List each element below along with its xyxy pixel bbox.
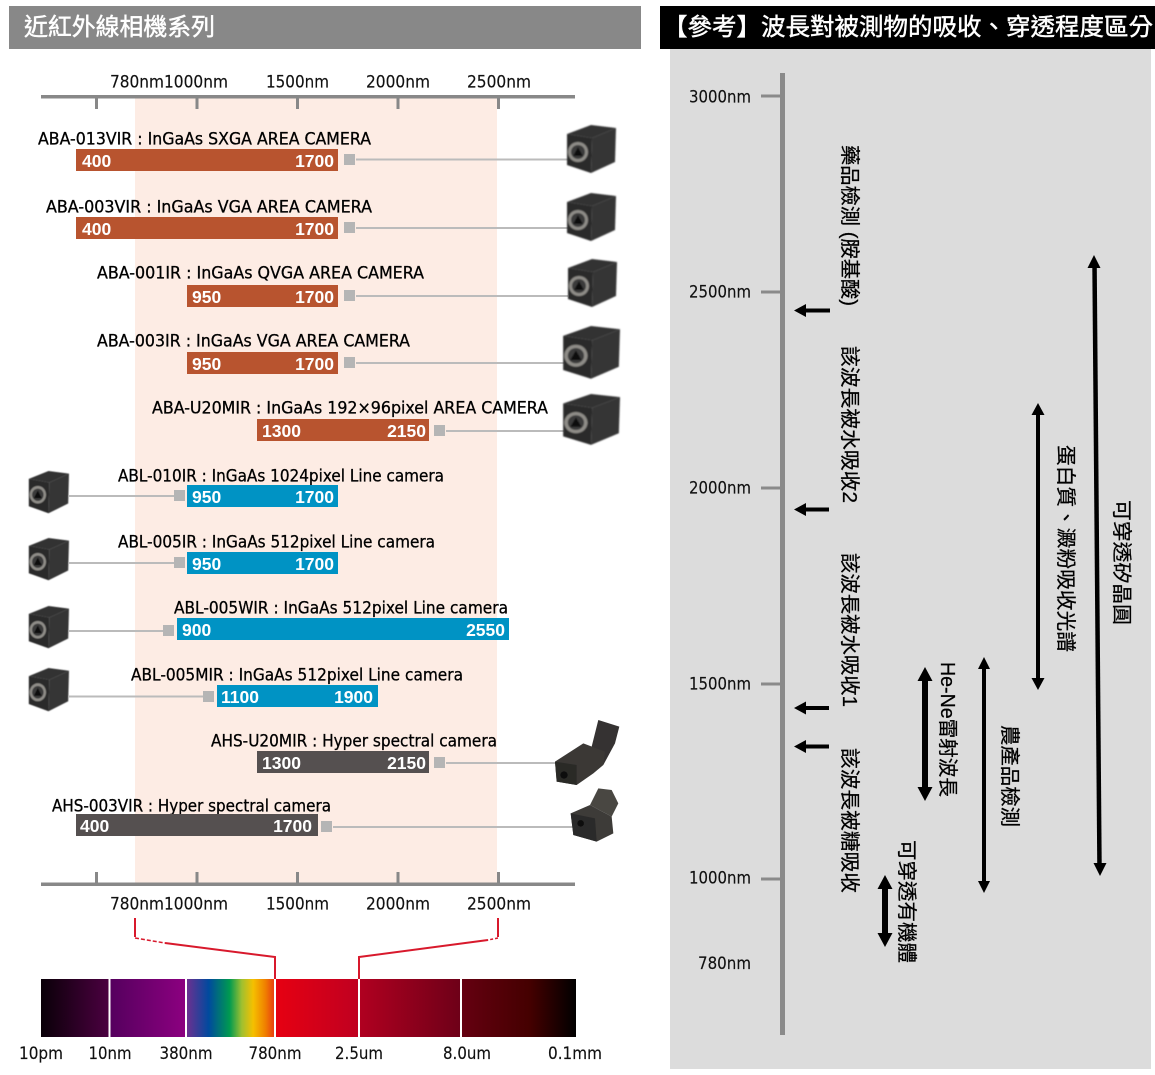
camera row: ABL-005IR: 950 (192, 554, 221, 574)
label: protein and starch: 蛋白質、澱粉吸收光譜 (1054, 445, 1077, 652)
header: reference wavelength chart (660, 6, 1155, 49)
camera row: ABL-005MIR (29, 666, 463, 711)
camera row: ABL-005WIR: 2550 (466, 620, 505, 640)
camera row: AHS-003VIR: 1700 (273, 816, 312, 836)
range arrow: protein and starch (1032, 403, 1044, 690)
label: agricultural inspection: 農產品檢測 (998, 725, 1021, 827)
red zoom connector lines (135, 918, 498, 979)
range arrow: agricultural inspection (978, 657, 990, 893)
header: reference wavelength chart: 【參考】波長對被測物的吸收、穿透程度區分 (663, 14, 1153, 41)
camera row: ABL-005IR: ABL-005IR : InGaAs 512pixel Line camera (118, 532, 435, 552)
rotated absorption labels: 該波長被糖吸收 (838, 748, 861, 893)
vertical wavelength axis: 1500nm (689, 674, 751, 694)
camera row: AHS-U20MIR: 2150 (387, 753, 426, 773)
label: organic matter: 可穿透有機體 (895, 840, 918, 963)
panel: wavelength absorption and penetration (670, 49, 1151, 1069)
camera row: AHS-003VIR: 400 (80, 816, 109, 836)
vertical wavelength axis: 2000nm (689, 478, 751, 498)
camera row: AHS-U20MIR (211, 720, 619, 785)
camera row: ABA-003VIR: ABA-003VIR : InGaAs VGA AREA CAMERA (46, 198, 373, 216)
label: silicon wafer: 可穿透矽晶圓 (1110, 500, 1133, 625)
top wavelength axis (41, 72, 575, 109)
absorption arrows pointing to axis (794, 304, 830, 753)
range arrow: He-Ne laser (918, 667, 932, 801)
camera row: ABA-U20MIR: 1300 (262, 421, 301, 441)
bottom wavelength axis: 780nm (110, 894, 164, 914)
camera row: ABL-005MIR: ABL-005MIR : InGaAs 512pixel Line camera (131, 666, 463, 684)
bottom wavelength axis: 2000nm (366, 894, 430, 914)
electromagnetic spectrum bar (41, 979, 576, 1037)
bottom wavelength axis: 1000nm (164, 894, 228, 914)
camera row: AHS-U20MIR: 1300 (262, 753, 301, 773)
rotated absorption labels: 該波長被水吸收2 (838, 346, 861, 503)
spectrum scale labels: 2.5um (335, 1044, 383, 1063)
camera row: ABA-013VIR: 1700 (295, 151, 334, 171)
camera row: ABL-005WIR (29, 598, 509, 648)
rotated absorption labels (838, 145, 861, 893)
bottom wavelength axis: 2500nm (467, 894, 531, 914)
camera row: ABA-003IR (97, 326, 620, 379)
spectrum scale labels: 8.0um (443, 1044, 491, 1063)
camera row: ABL-005MIR: 1900 (334, 687, 373, 707)
camera row: ABL-005WIR: 900 (182, 620, 211, 640)
spectrum scale labels: 10pm (19, 1044, 63, 1063)
camera row: ABL-005WIR: ABL-005WIR : InGaAs 512pixel Line camera (174, 598, 508, 618)
rotated absorption labels: 藥品檢測 (胺基酸) (838, 145, 861, 306)
vertical wavelength axis: 780nm (698, 954, 751, 973)
spectrum scale labels: 0.1mm (548, 1044, 602, 1063)
label: He-Ne laser: He-Ne雷射波長 (936, 662, 959, 797)
camera row: ABA-U20MIR: ABA-U20MIR : InGaAs 192×96pixel AREA CAMERA (152, 398, 549, 418)
camera row: ABL-010IR (29, 466, 444, 513)
near-infrared highlight band (135, 96, 497, 884)
camera row: ABA-003IR: 1700 (295, 354, 334, 374)
camera row: ABA-003VIR (46, 193, 616, 241)
camera row: ABL-005IR: 1700 (295, 554, 334, 574)
camera row: AHS-U20MIR: AHS-U20MIR : Hyper spectral camera (211, 732, 497, 750)
rotated absorption labels: 該波長被水吸收1 (838, 553, 861, 707)
camera row: ABA-001IR: 1700 (295, 287, 334, 307)
top wavelength axis: 2000nm (366, 72, 430, 92)
range arrow: silicon wafer (1088, 255, 1106, 876)
camera row: ABA-003VIR: 400 (82, 219, 111, 239)
camera row: ABA-013VIR (38, 125, 616, 173)
header: near-infrared camera series (9, 6, 641, 49)
vertical wavelength axis: 2500nm (689, 282, 751, 302)
camera row: ABA-003IR: 950 (192, 354, 221, 374)
camera row: ABL-005MIR: 1100 (221, 687, 259, 707)
spectrum scale labels (19, 1044, 602, 1063)
vertical wavelength axis (689, 73, 785, 1035)
vertical wavelength axis: 3000nm (689, 88, 751, 106)
spectrum scale labels: 780nm (248, 1044, 302, 1063)
range arrow: organic matter (878, 875, 892, 947)
camera row: ABA-001IR (97, 259, 617, 307)
top wavelength axis: 2500nm (467, 72, 531, 92)
panel: camera wavelength ranges (29, 72, 620, 914)
spectrum scale labels: 10nm (88, 1044, 132, 1063)
spectrum scale labels: 380nm (160, 1044, 212, 1063)
camera row: ABA-003VIR: 1700 (295, 219, 334, 239)
bottom wavelength axis: 1500nm (266, 894, 329, 914)
camera row: AHS-003VIR (52, 788, 618, 842)
header: near-infrared camera series: 近紅外線相機系列 (24, 14, 215, 41)
camera row: ABA-013VIR: 400 (82, 151, 111, 171)
vertical wavelength axis: 1000nm (689, 868, 751, 888)
camera row: ABA-001IR: ABA-001IR : InGaAs QVGA AREA CAMERA (97, 264, 425, 282)
camera row: ABA-001IR: 950 (192, 287, 221, 307)
camera row: ABA-013VIR: ABA-013VIR : InGaAs SXGA AREA CAMERA (38, 130, 372, 148)
camera row: ABL-010IR: 950 (192, 487, 221, 507)
camera row: ABA-003IR: ABA-003IR : InGaAs VGA AREA CAMERA (97, 332, 411, 350)
top wavelength axis: 1500nm (266, 72, 329, 92)
camera row: ABL-010IR: ABL-010IR : InGaAs 1024pixel Line camera (118, 466, 444, 486)
camera row: ABL-010IR: 1700 (295, 487, 334, 507)
camera row: ABA-U20MIR: 2150 (387, 421, 426, 441)
camera row: AHS-003VIR: AHS-003VIR : Hyper spectral camera (52, 796, 331, 816)
top wavelength axis: 1000nm (164, 72, 228, 92)
camera row: ABA-U20MIR (152, 394, 620, 445)
bottom wavelength axis (41, 872, 575, 914)
camera row: ABL-005IR (29, 532, 435, 580)
top wavelength axis: 780nm (110, 72, 164, 92)
